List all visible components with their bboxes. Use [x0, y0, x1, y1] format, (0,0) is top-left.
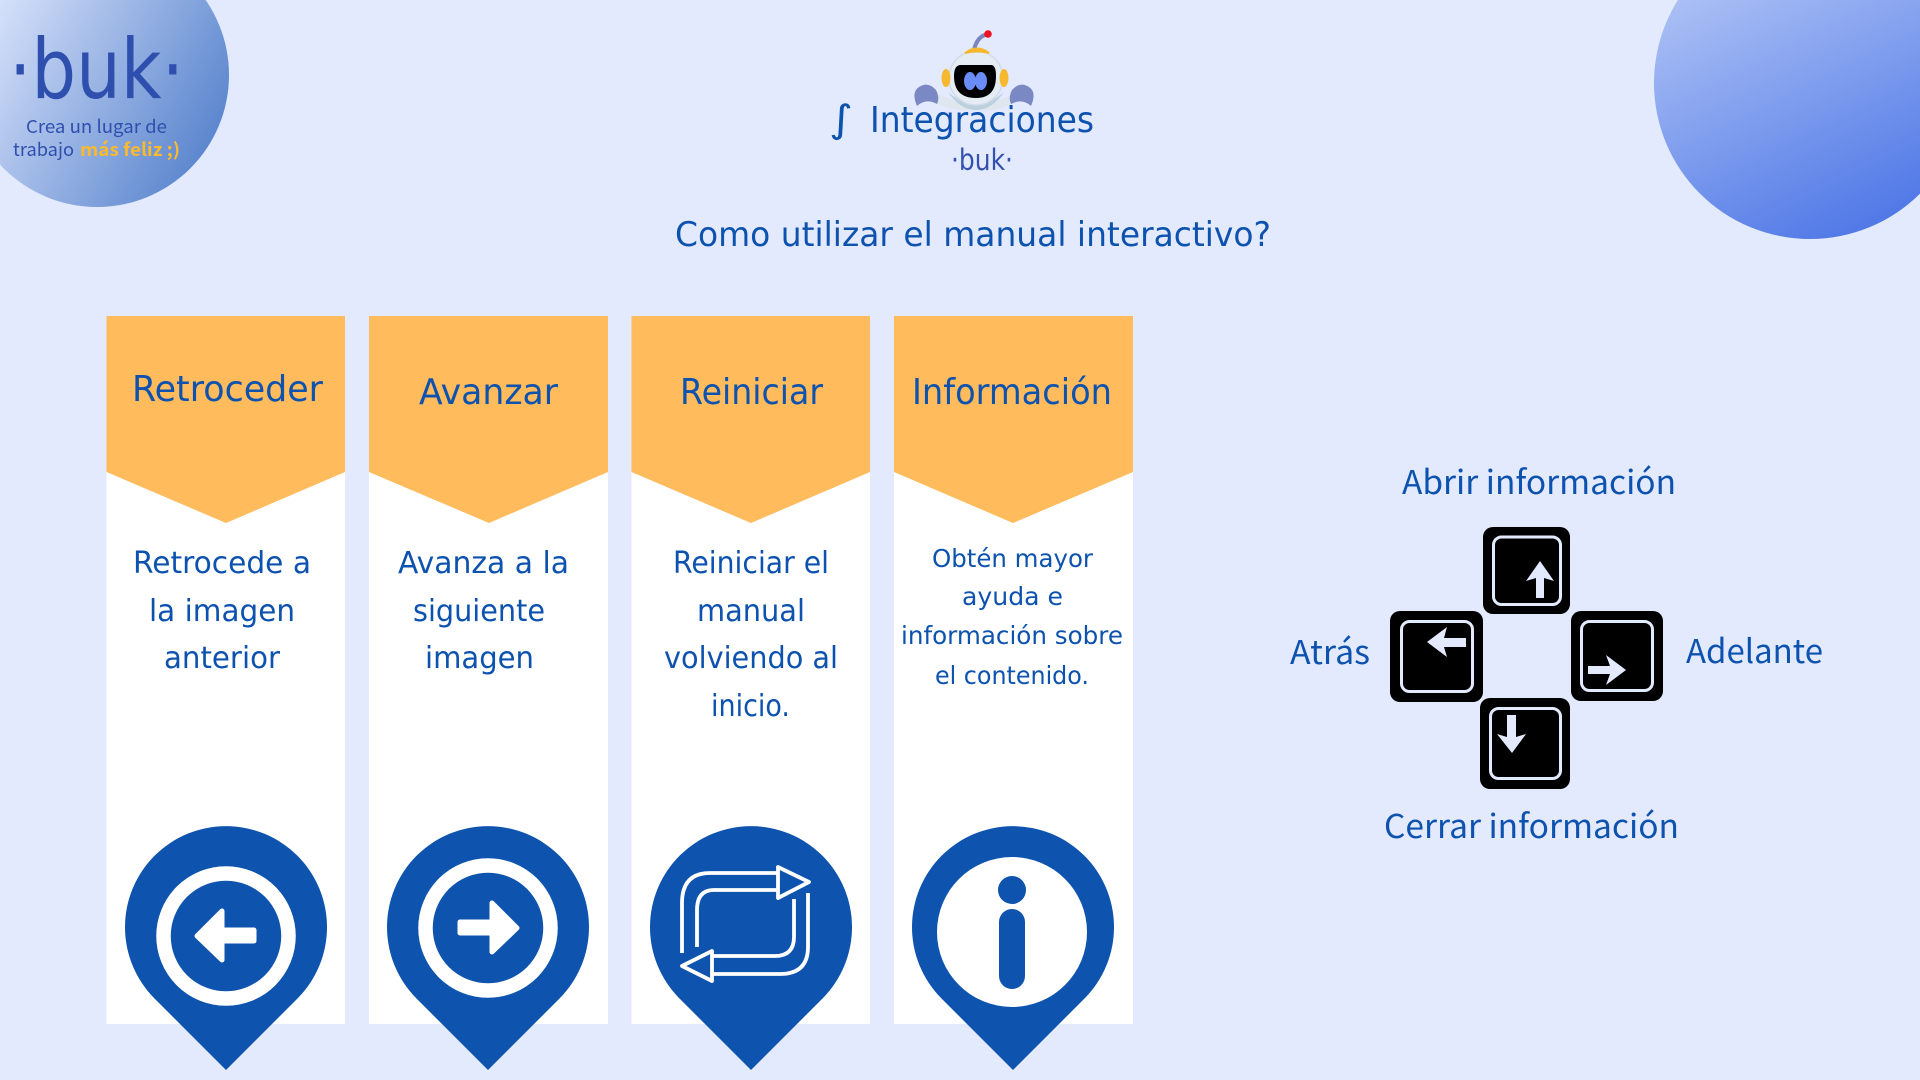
- icon: robot mascot: [914, 30, 1034, 110]
- decorative corner circle: [1654, 0, 1920, 239]
- text: Información description: información sobre: [901, 621, 1123, 650]
- text: Avanzar description: [398, 546, 569, 676]
- heading: Avanzar: Avanzar: [419, 372, 558, 413]
- logo badge: buk: Crea un lugar de: [26, 113, 167, 139]
- text: Avanzar description: Avanza a la: [398, 546, 569, 581]
- title: Como utilizar el manual interactivo?: [675, 215, 1271, 255]
- logo badge: buk: más feliz ;): [80, 136, 180, 162]
- icon: information pin: [912, 826, 1114, 1070]
- logo badge: buk: trabajo: [13, 136, 74, 162]
- heading: Información: Información: [912, 372, 1112, 413]
- icon: up arrow key: [1483, 527, 1570, 614]
- text: Retroceder description: la imagen: [149, 594, 295, 629]
- text: Información description: Obtén mayor: [932, 544, 1094, 573]
- heading: Reiniciar: Reiniciar: [680, 372, 823, 413]
- text: Avanzar description: siguiente: [413, 594, 545, 629]
- label: Adelante: Adelante: [1686, 625, 1823, 673]
- text: Información description: el contenido.: [935, 661, 1089, 690]
- icon: right arrow key: [1571, 611, 1663, 701]
- text: Retroceder description: [133, 546, 311, 676]
- brand heading: Integraciones: ∫: [829, 97, 853, 141]
- text: Reiniciar description: [664, 546, 838, 724]
- panel: Avanzar: [369, 316, 608, 1070]
- text: Reiniciar description: inicio.: [711, 689, 790, 724]
- text: Información description: ayuda e: [962, 582, 1063, 611]
- heading: Retroceder: Retroceder: [132, 369, 323, 410]
- text: Reiniciar description: manual: [697, 594, 805, 629]
- icon: back arrow pin: [125, 826, 327, 1070]
- text: Reiniciar description: volviendo al: [664, 641, 838, 676]
- brand heading: Integraciones: [829, 97, 1094, 177]
- icon: repeat arrows pin: [650, 826, 852, 1070]
- text: Retroceder description: anterior: [164, 641, 281, 676]
- label: Abrir información: Abrir información: [1402, 456, 1676, 504]
- label: Cerrar información: Cerrar información: [1384, 800, 1679, 848]
- brand heading: Integraciones: Integraciones: [870, 100, 1094, 141]
- icon: forward arrow pin: [387, 826, 589, 1070]
- label: Atrás: Atrás: [1290, 626, 1370, 674]
- text: Avanzar description: imagen: [425, 641, 534, 676]
- brand heading: Integraciones: ·buk·: [951, 143, 1013, 177]
- logo badge: buk: [0, 0, 229, 207]
- icon: down arrow key: [1480, 698, 1570, 789]
- icon: left arrow key: [1390, 611, 1483, 702]
- logo badge: buk: ·buk·: [9, 21, 184, 118]
- text: Retroceder description: Retrocede a: [133, 546, 311, 581]
- text: Reiniciar description: Reiniciar el: [673, 546, 829, 581]
- text: Información description: [901, 544, 1123, 690]
- panel: Reiniciar: [632, 316, 870, 1070]
- panel: Retroceder: [106, 316, 345, 1070]
- panel: Información: [894, 316, 1133, 1070]
